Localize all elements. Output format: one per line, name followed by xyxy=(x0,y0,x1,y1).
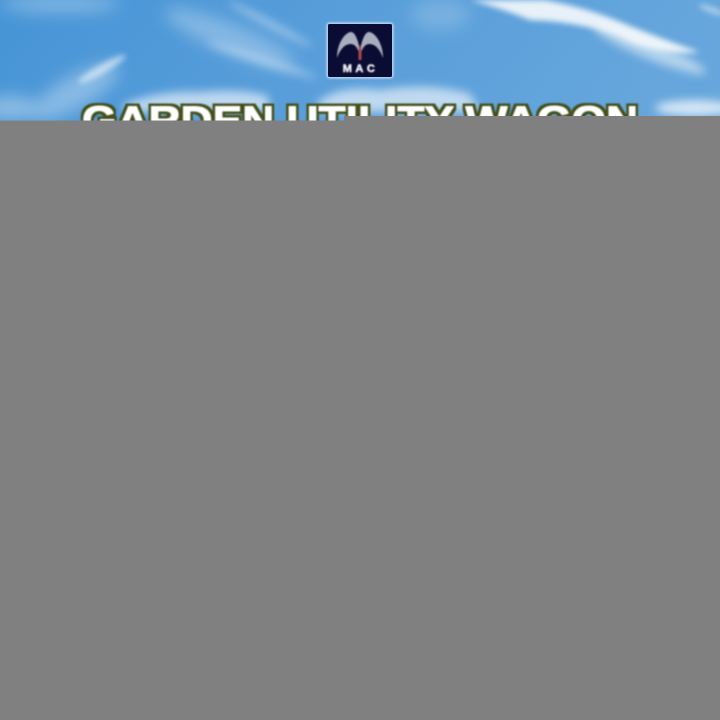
title: GARDEN UTILITY WAGON xyxy=(82,99,638,143)
logo wordmark: MAC xyxy=(343,63,378,75)
sky background with clouds xyxy=(0,0,720,131)
logo: MAC badge xyxy=(326,22,394,78)
icon: winged M emblem xyxy=(337,32,383,60)
